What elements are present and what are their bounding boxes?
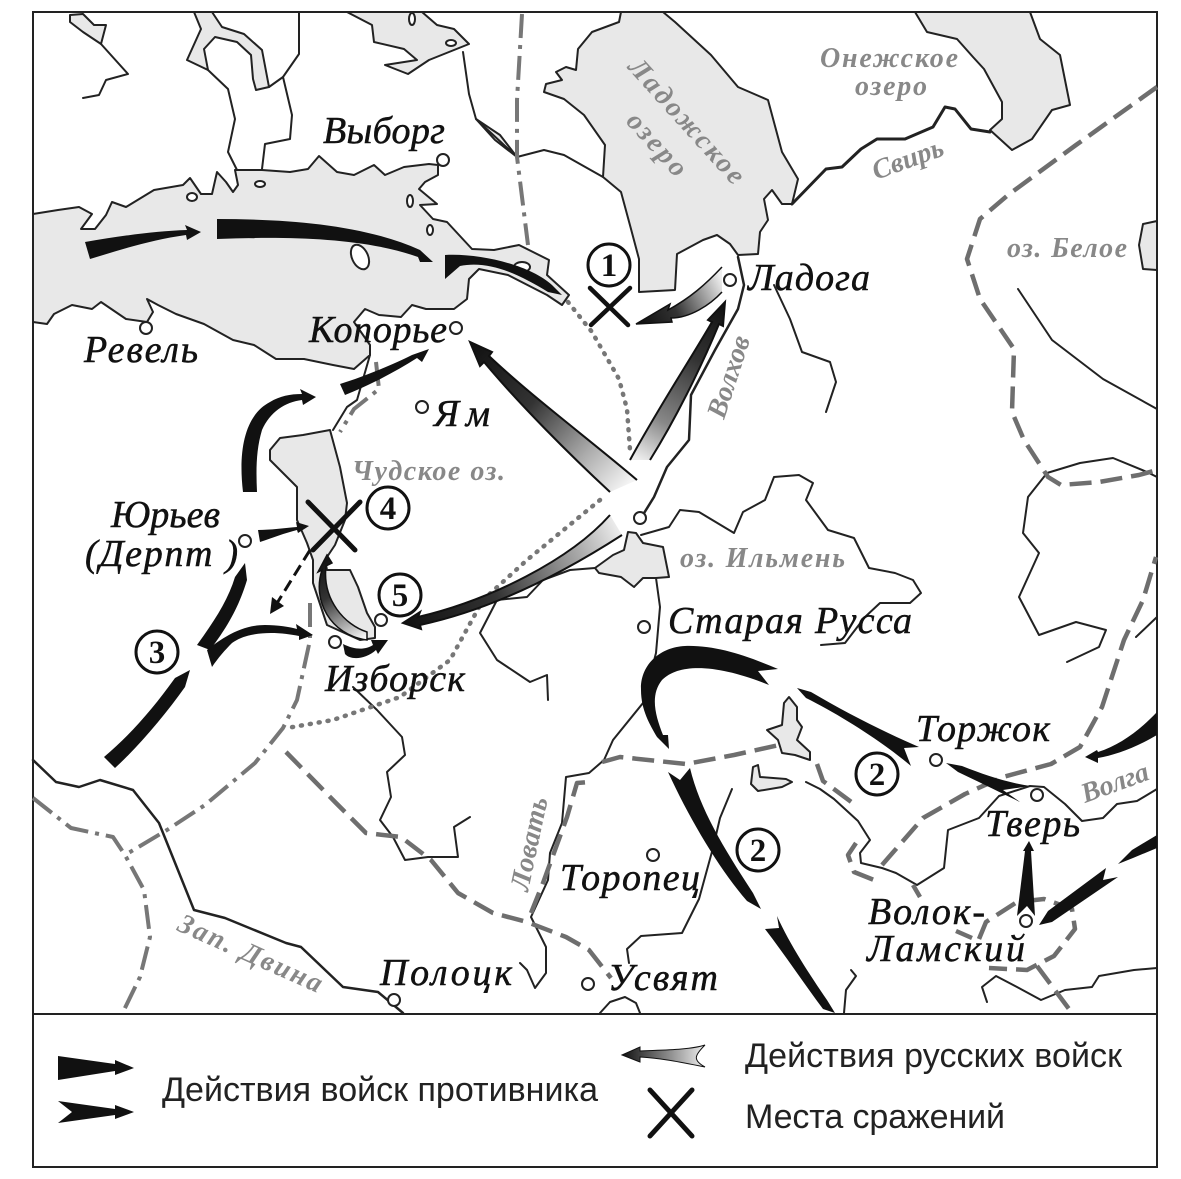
battle crosses [308,288,630,550]
water labels: Ловать [504,794,555,894]
city labels: Старая Русса [668,600,912,642]
islands in the gulf [187,181,530,272]
Lake Peipus and Pskov [270,430,375,640]
water labels: оз. Белое [1007,233,1127,264]
city labels: Ладога [747,257,870,299]
Lake Onega [915,12,1070,150]
legend: battle text: Места сражений [745,1098,1005,1136]
city labels: Тверь [985,803,1080,845]
Gulf of Finland [33,156,569,369]
water labels: озеро [855,71,927,102]
city labels: (Дерпт ) [85,533,238,575]
city labels: Изборск [324,658,466,700]
city labels [83,110,1080,999]
numbered circles: 2 [750,833,766,869]
city labels: Ревель [83,329,198,371]
water labels: Чудское оз. [352,456,505,487]
Lake Ilmen [595,532,669,587]
legend: Russian arrow [622,1045,705,1067]
city labels: Полоцк [379,952,513,994]
towns [140,154,1043,1006]
numbered circles: 2 [869,757,885,793]
legend: Russian text: Действия русских войск [745,1037,1123,1075]
numbered circles: 5 [392,578,408,614]
enemy arrows [85,219,1157,1013]
water labels: Свирь [868,132,948,187]
city labels: Усвят [608,957,718,999]
city labels: Ям [432,393,490,435]
water labels: озеро [620,106,694,183]
water labels: Волга [1076,757,1153,810]
legend: enemy text: Действия войск противника [162,1071,598,1109]
small lake [751,765,792,791]
northern lakes [70,12,517,157]
water labels: оз. Ильмень [680,543,845,574]
city labels: Торжок [916,708,1051,750]
numbered circles: 1 [601,248,617,284]
Lake Ladoga [544,12,798,292]
water labels: Онежское [820,43,958,74]
water labels: Ладожское [621,51,751,191]
city labels: Ламский [866,928,1025,970]
water labels: Зап. Двина [172,908,327,999]
city labels: Торопец [560,857,700,899]
Russian arrows [270,267,725,640]
legend [33,1014,1157,1167]
Lake Beloye [1139,221,1157,270]
water labels: Волхов [701,331,757,423]
Lake Seliger [767,697,810,760]
numbered circles [136,244,898,871]
water labels [172,43,1153,999]
city labels: Копорье [308,309,447,351]
legend: enemy arrow 1 [58,1056,134,1080]
legend: enemy arrow 2 [58,1101,134,1123]
city labels: Волок- [868,891,985,933]
city labels: Юрьев [110,494,220,536]
legend: battle cross [650,1090,692,1136]
numbered circles: 3 [149,635,165,671]
city labels: Выборг [323,110,445,152]
numbered circles: 4 [380,491,396,527]
